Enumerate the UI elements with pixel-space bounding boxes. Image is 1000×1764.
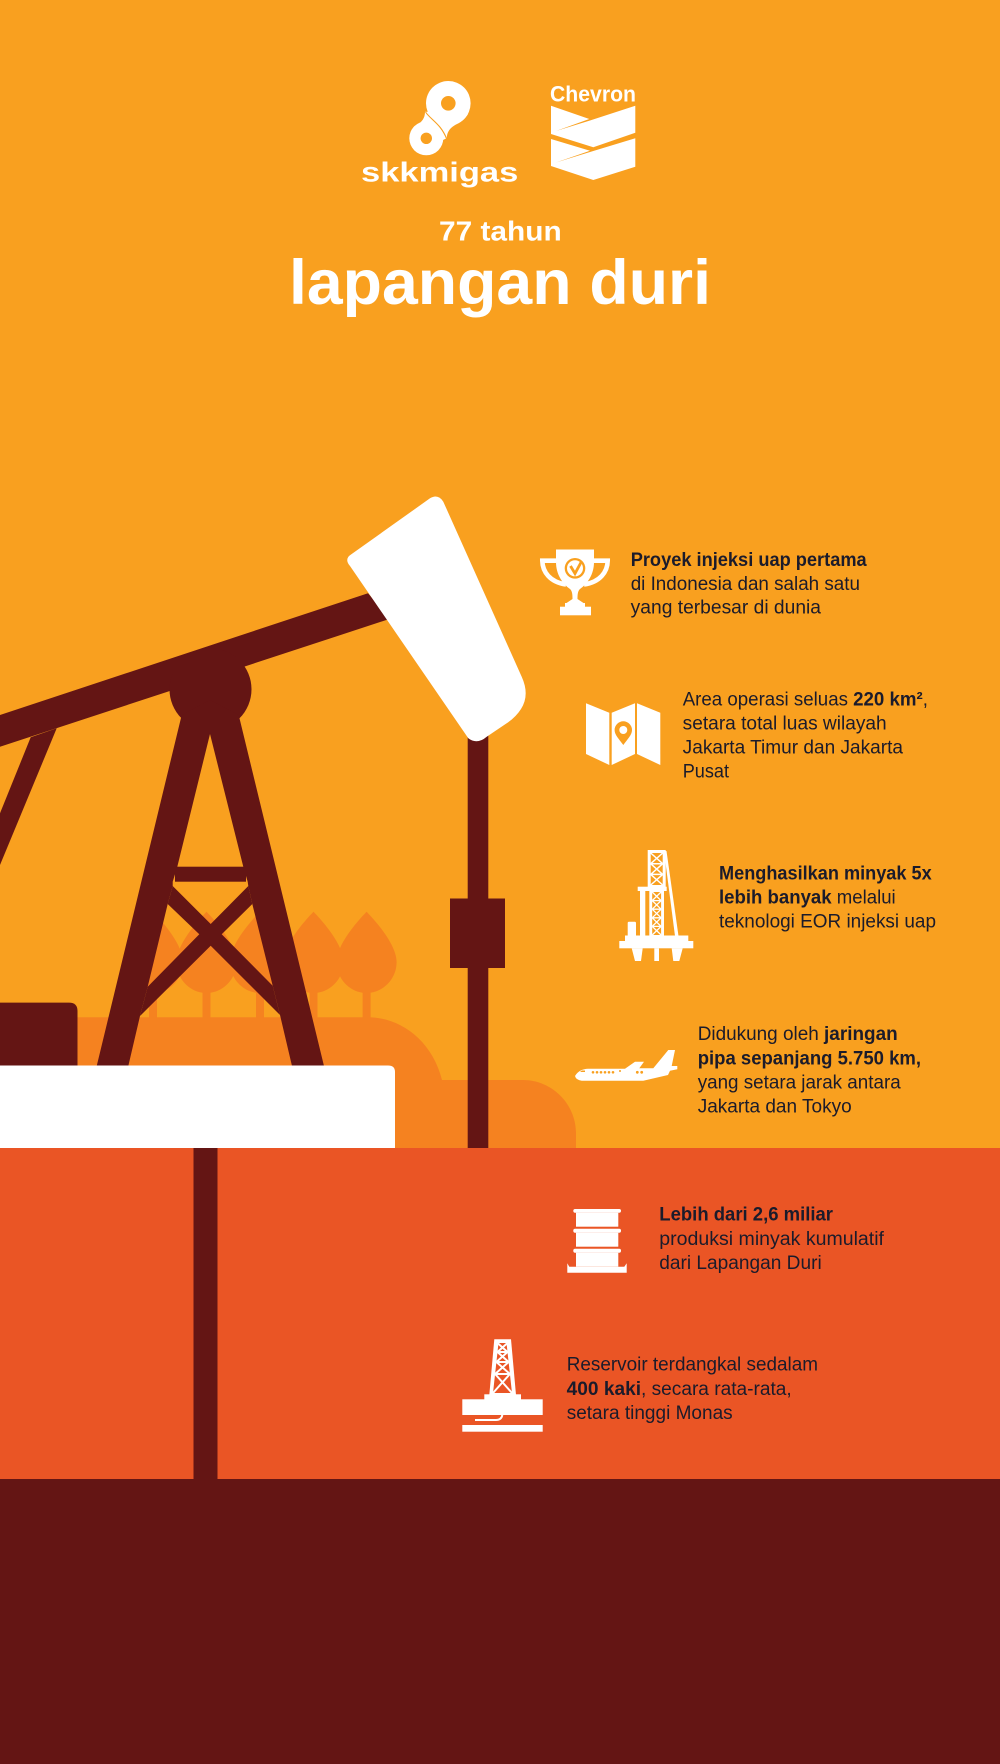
right leg — [210, 700, 324, 1066]
heading: 77 tahun: 77 tahun — [439, 216, 562, 247]
text: jaringan pipa: pipa sepanjang 5.750 km, — [698, 1048, 921, 1069]
title: lapangan duri: lapangan duri — [289, 248, 711, 318]
text: jaringan pipa — [698, 1024, 921, 1117]
counterweight box — [0, 1003, 78, 1066]
tree row — [123, 912, 397, 1018]
item 6: shallow reservoir — [462, 1339, 818, 1432]
icon: derrick over reservoir — [462, 1339, 543, 1432]
text: reservoir: 400 kaki, secara rata-rata, — [567, 1379, 792, 1400]
left leg — [97, 700, 210, 1066]
text: proyek injeksi uap: Proyek injeksi uap pertama — [631, 550, 867, 571]
polished rod — [468, 730, 488, 1148]
item 4: pipeline network — [575, 1024, 921, 1117]
text: jaringan pipa: yang setara jarak antara — [698, 1072, 901, 1093]
samson post bearing — [170, 648, 252, 730]
text: lebih dari 2,6 miliar — [659, 1205, 885, 1274]
item 2: operating area — [586, 690, 928, 782]
text: proyek injeksi uap: yang terbesar di dunia — [631, 598, 821, 619]
oil pumpjack — [0, 593, 505, 1479]
text: area operasi: setara total luas wilayah — [683, 713, 887, 734]
text: proyek injeksi uap — [631, 550, 867, 619]
text: menghasilkan minyak: Menghasilkan minyak 5x — [719, 863, 932, 884]
horse head — [347, 497, 526, 741]
text: jaringan pipa: Didukung oleh jaringan — [698, 1024, 898, 1045]
text: lebih dari 2,6 miliar: Lebih dari 2,6 miliar — [659, 1205, 834, 1226]
logo: Chevron: Chevron — [550, 82, 636, 107]
logo: Chevron — [550, 82, 636, 180]
text: area operasi: Area operasi seluas 220 km², — [683, 690, 928, 711]
item 5: cumulative production — [567, 1205, 885, 1274]
item 1: first steam injection project — [542, 550, 867, 619]
text: reservoir — [567, 1355, 818, 1424]
text: reservoir: setara tinggi Monas — [567, 1403, 733, 1424]
walking beam — [0, 593, 390, 747]
text: jaringan pipa: Jakarta dan Tokyo — [698, 1096, 852, 1117]
text: lebih dari 2,6 miliar: produksi minyak kumulatif — [659, 1229, 885, 1250]
crossbar — [175, 867, 246, 882]
text: menghasilkan minyak: lebih banyak melalui — [719, 887, 896, 908]
background: sky — [0, 0, 1000, 1149]
underground pipe — [194, 1148, 218, 1479]
item 3: five times more oil — [619, 850, 936, 961]
text: area operasi — [683, 690, 928, 782]
background: upper soil layer — [0, 1148, 1000, 1479]
logo: skkmigas: skkmigas — [361, 157, 518, 188]
text: area operasi: Pusat — [683, 761, 730, 782]
text: reservoir: Reservoir terdangkal sedalam — [567, 1355, 818, 1376]
background: deep soil layer — [0, 1479, 1000, 1764]
hills — [70, 1017, 576, 1148]
rear brace — [0, 728, 57, 865]
X bracing — [140, 886, 280, 1016]
background hills and trees — [70, 912, 576, 1148]
logo: skkmigas — [361, 81, 518, 188]
icon: trophy — [542, 550, 608, 615]
icon: oil barrels — [567, 1209, 627, 1273]
text: menghasilkan minyak: teknologi EOR injeksi uap — [719, 912, 936, 933]
text: menghasilkan minyak — [719, 863, 936, 933]
icon: drilling rig — [619, 850, 693, 961]
text: lebih dari 2,6 miliar: dari Lapangan Duri — [659, 1253, 822, 1274]
base platform — [0, 1066, 395, 1148]
text: area operasi: Jakarta Timur dan Jakarta — [683, 737, 903, 758]
stuffing box clamp — [450, 898, 505, 968]
icon: airplane — [575, 1050, 677, 1081]
icon: map — [586, 703, 660, 765]
text: proyek injeksi uap: di Indonesia dan salah satu — [631, 574, 860, 595]
